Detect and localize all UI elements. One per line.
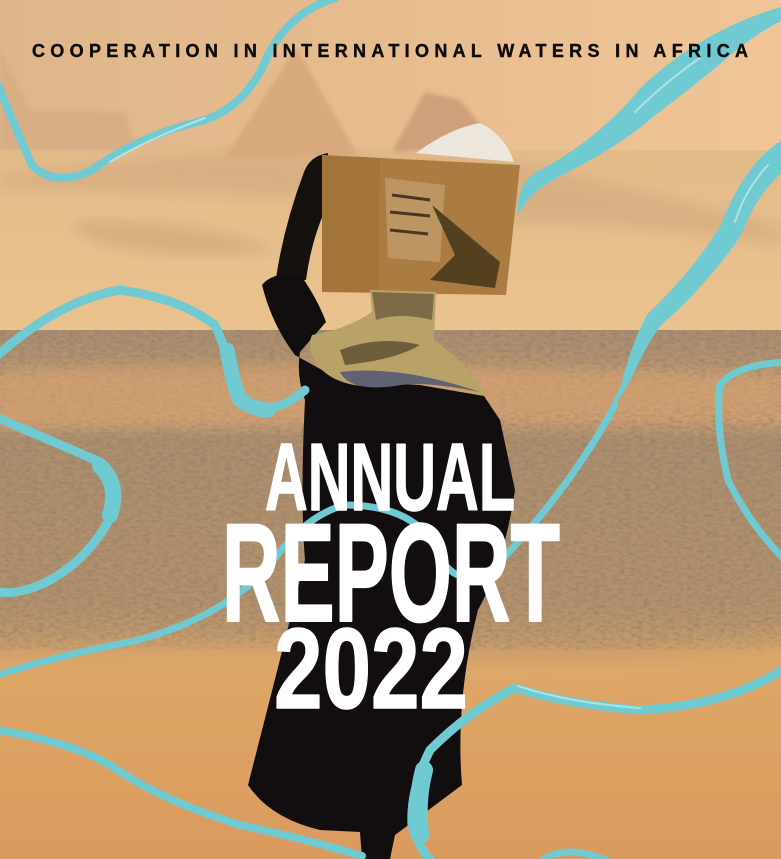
ribbon: bottom edge xyxy=(540,852,610,859)
title word: 2022: 2022 xyxy=(274,606,468,733)
title: annual report 2022 xyxy=(222,424,560,733)
ribbon highlights xyxy=(110,58,768,708)
ribbon: top right xyxy=(519,8,781,212)
pyramids xyxy=(0,48,498,158)
black dress xyxy=(248,274,515,859)
header line: COOPERATION IN INTERNATIONAL WATERS IN AFRICA xyxy=(32,41,748,61)
headscarf xyxy=(310,290,485,396)
ribbon: left middle xyxy=(0,290,305,408)
ribbon: long diagonal lower xyxy=(0,405,615,675)
raised arm xyxy=(276,153,330,280)
white bundle xyxy=(416,123,514,162)
title word: annual: ANNUAL xyxy=(265,424,515,531)
ribbon: top left xyxy=(0,0,335,178)
ribbon: right xyxy=(719,362,781,560)
cardboard box xyxy=(322,155,520,295)
ribbon: left lower swell xyxy=(100,466,113,515)
ribbon: bottom left xyxy=(0,730,362,856)
ribbon: left middle swell xyxy=(227,350,268,410)
ribbon: left lower xyxy=(0,418,116,593)
ribbon: long diagonal upper xyxy=(610,142,781,410)
ribbon: bottom right swell xyxy=(419,770,424,835)
ribbon: bottom right xyxy=(412,668,781,859)
woman carrying box xyxy=(248,123,520,859)
